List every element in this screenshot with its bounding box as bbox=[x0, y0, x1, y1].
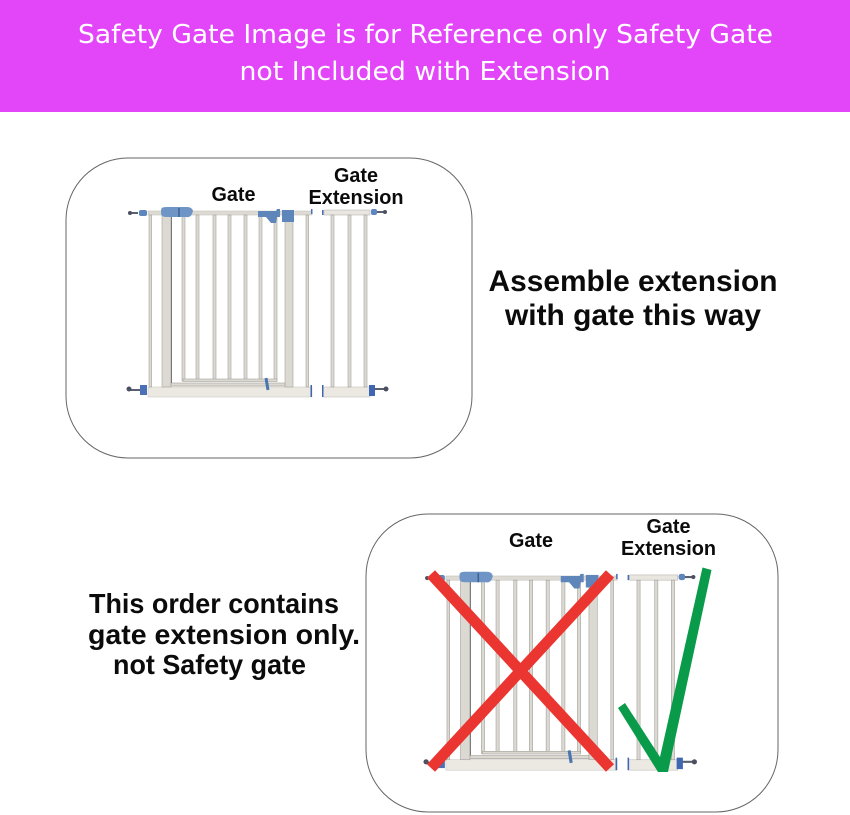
banner: header: Safety Gate Image is for Reference only Safety Gate bbox=[78, 20, 773, 50]
panel: what is included bbox=[366, 514, 778, 812]
label: Gate Extension: Extension bbox=[621, 538, 716, 560]
label: Gate Extension bbox=[621, 516, 716, 560]
text: assemble instruction: Assemble extension bbox=[488, 265, 778, 298]
label: Gate Extension: Gate bbox=[646, 516, 690, 538]
icon: red cross over gate bbox=[431, 574, 610, 768]
illustration: safety gate bbox=[423, 572, 618, 770]
illustration: gate extension bbox=[628, 574, 697, 770]
label: Gate Extension bbox=[308, 165, 404, 209]
banner: header: not Included with Extension bbox=[240, 57, 610, 87]
illustration: gate extension bbox=[322, 209, 388, 397]
label: Gate Extension: Gate bbox=[334, 165, 378, 187]
text: assemble instruction bbox=[488, 265, 778, 332]
label: Gate: Gate bbox=[509, 530, 553, 552]
panel: correct assembly bbox=[66, 158, 472, 458]
text: order note: gate extension only. bbox=[88, 619, 360, 650]
banner: header bbox=[0, 0, 850, 112]
text: order note: This order contains bbox=[89, 588, 339, 619]
text: assemble instruction: with gate this way bbox=[504, 299, 761, 332]
text: order note: not Safety gate bbox=[113, 649, 306, 680]
illustration: safety gate bbox=[126, 207, 312, 397]
label: Gate Extension: Extension bbox=[308, 187, 404, 209]
label: Gate: Gate bbox=[212, 184, 256, 206]
icon: green check mark bbox=[618, 568, 712, 772]
text: order note bbox=[88, 588, 360, 680]
